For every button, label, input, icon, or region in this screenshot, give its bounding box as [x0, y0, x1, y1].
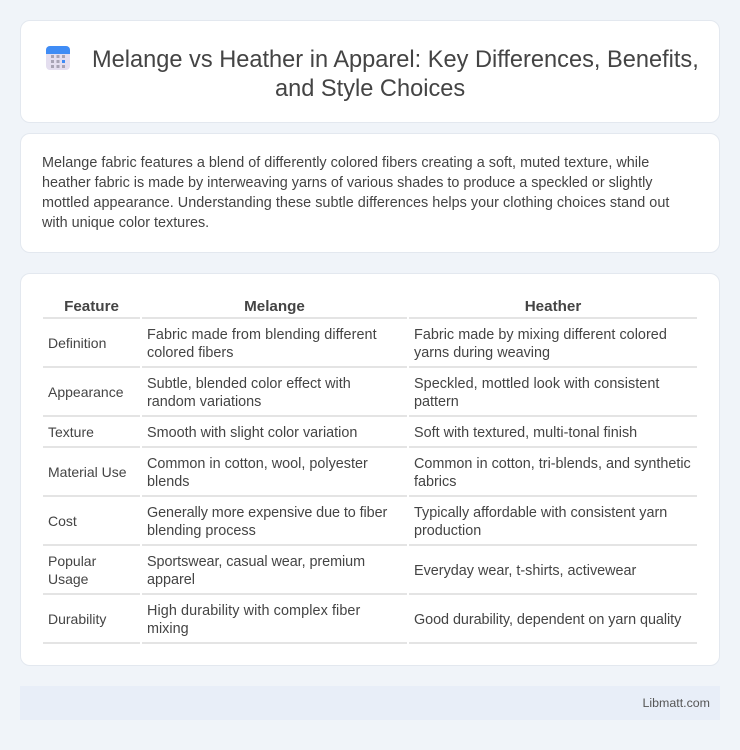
row: Definition: yarns during weaving: [414, 345, 550, 361]
column header: Heather: Heather: [525, 298, 581, 315]
row: Popular Usage: apparel: [147, 572, 195, 588]
row: Durability: [48, 603, 682, 637]
row: Popular Usage: Everyday wear, t-shirts, activewear: [414, 563, 636, 579]
row: Material Use: Material Use: [48, 464, 127, 480]
intro panel: [20, 133, 720, 253]
row: Cost: Typically affordable with consistent yarn: [414, 505, 667, 521]
row: Definition: Fabric made by mixing different colored: [414, 327, 667, 343]
intro text: Melange fabric features a blend of differently colored fibers creating a soft, muted texture, while: [42, 155, 649, 171]
row: Appearance: random variations: [147, 394, 261, 410]
intro text: [42, 155, 670, 231]
row: Appearance: pattern: [414, 394, 459, 410]
row: Cost: blending process: [147, 523, 256, 539]
row: Appearance: Speckled, mottled look with consistent: [414, 376, 659, 392]
icon: calendar grid: [46, 46, 70, 70]
row: Durability: Durability: [48, 611, 106, 627]
row: Texture: Texture: [48, 424, 94, 440]
row: Cost: Generally more expensive due to fiber: [147, 505, 387, 521]
title: Melange vs Heather in Apparel: Key Differences, Benefits,: [92, 47, 699, 73]
row: Material Use: Common in cotton, tri-blends, and synthetic: [414, 456, 691, 472]
row: Appearance: Subtle, blended color effect with: [147, 376, 351, 392]
row: Appearance: Appearance: [48, 384, 124, 400]
row: Durability: mixing: [147, 621, 189, 637]
row: Cost: Cost: [48, 513, 77, 529]
row: Definition: Fabric made from blending different: [147, 327, 377, 343]
row: Durability: High durability with complex fiber: [147, 603, 360, 619]
title: [92, 47, 699, 102]
row: Durability: Good durability, dependent on yarn quality: [414, 612, 681, 628]
table panel: [20, 273, 720, 666]
intro text: heather fabric is made by interweaving yarns of various shades to produce a speckled or slightly: [42, 175, 652, 191]
row: Texture: Soft with textured, multi-tonal finish: [414, 425, 637, 441]
intro text: mottled appearance. Understanding these subtle differences helps your clothing choices stand out: [42, 195, 669, 211]
row: Definition: [48, 327, 667, 361]
row: Texture: Smooth with slight color variation: [147, 425, 357, 441]
row: Popular Usage: Sportswear, casual wear, premium: [147, 554, 365, 570]
row: Popular Usage: Popular: [48, 553, 96, 569]
title: and Style Choices: [275, 76, 465, 102]
row: Material Use: [48, 456, 691, 490]
row: Material Use: Common in cotton, wool, polyester: [147, 456, 368, 472]
row: Popular Usage: [48, 553, 636, 588]
row: Cost: production: [414, 523, 481, 539]
row: Definition: colored fibers: [147, 345, 233, 361]
column header: Melange: Melange: [244, 298, 305, 315]
row: Texture: [48, 424, 637, 441]
row: Material Use: fabrics: [414, 474, 456, 490]
column header: Feature: Feature: [64, 298, 119, 315]
footer text: Libmatt.com: [643, 696, 710, 710]
intro text: with unique color textures.: [42, 215, 209, 231]
row: Popular Usage: Usage: [48, 571, 88, 587]
footer bar: [20, 686, 720, 720]
row: Definition: Definition: [48, 335, 106, 351]
header card: [20, 20, 720, 123]
row: Appearance: [48, 376, 660, 410]
row: Cost: [48, 505, 667, 539]
row: Material Use: blends: [147, 474, 189, 490]
